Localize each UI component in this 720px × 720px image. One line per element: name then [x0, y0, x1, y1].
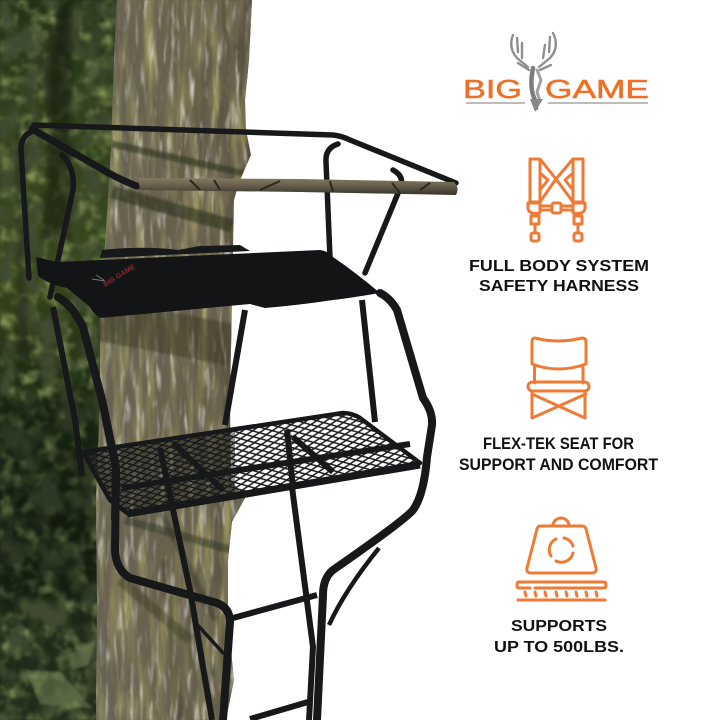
logo wordmark: GAME	[545, 74, 649, 104]
text: full body system safety harness	[469, 258, 649, 295]
camo padded rail	[138, 178, 458, 195]
seat logo: BIG GAME	[102, 264, 137, 289]
text: flex-tek seat	[459, 435, 658, 474]
upper right uprights	[326, 144, 338, 258]
photo: forest background	[0, 0, 125, 720]
text: flex-tek seat: SUPPORT AND COMFORT	[459, 456, 658, 474]
photo: tree trunk	[90, 0, 260, 720]
platform with mesh	[83, 413, 420, 514]
icon: safety harness	[528, 159, 585, 241]
side frame left	[58, 297, 230, 720]
shooting rail	[34, 125, 456, 183]
side frame right	[317, 293, 432, 720]
text: full body system safety harness: SAFETY HARNESS	[479, 278, 639, 295]
upper left side rails	[21, 132, 31, 278]
text: supports up to 500lbs: UP TO 500LBS.	[494, 639, 624, 656]
text: supports up to 500lbs	[494, 618, 624, 656]
text: supports up to 500lbs: SUPPORTS	[511, 618, 607, 635]
seat	[36, 245, 380, 318]
side frame over platform	[102, 400, 116, 520]
logo antlers and deer	[511, 33, 556, 108]
logo wordmark	[463, 74, 649, 104]
logo: Big Game	[463, 33, 649, 112]
strap shadows on trunk	[100, 144, 247, 720]
text: flex-tek seat: FLEX-TEK SEAT FOR	[483, 435, 634, 453]
icon: chair	[528, 338, 589, 418]
logo wordmark: BIG	[463, 74, 522, 104]
text: full body system safety harness: FULL BODY SYSTEM	[469, 258, 649, 275]
rear braces and posts	[53, 300, 379, 720]
product: ladder stand frame	[21, 125, 456, 720]
icon: weight on plate	[517, 518, 606, 600]
